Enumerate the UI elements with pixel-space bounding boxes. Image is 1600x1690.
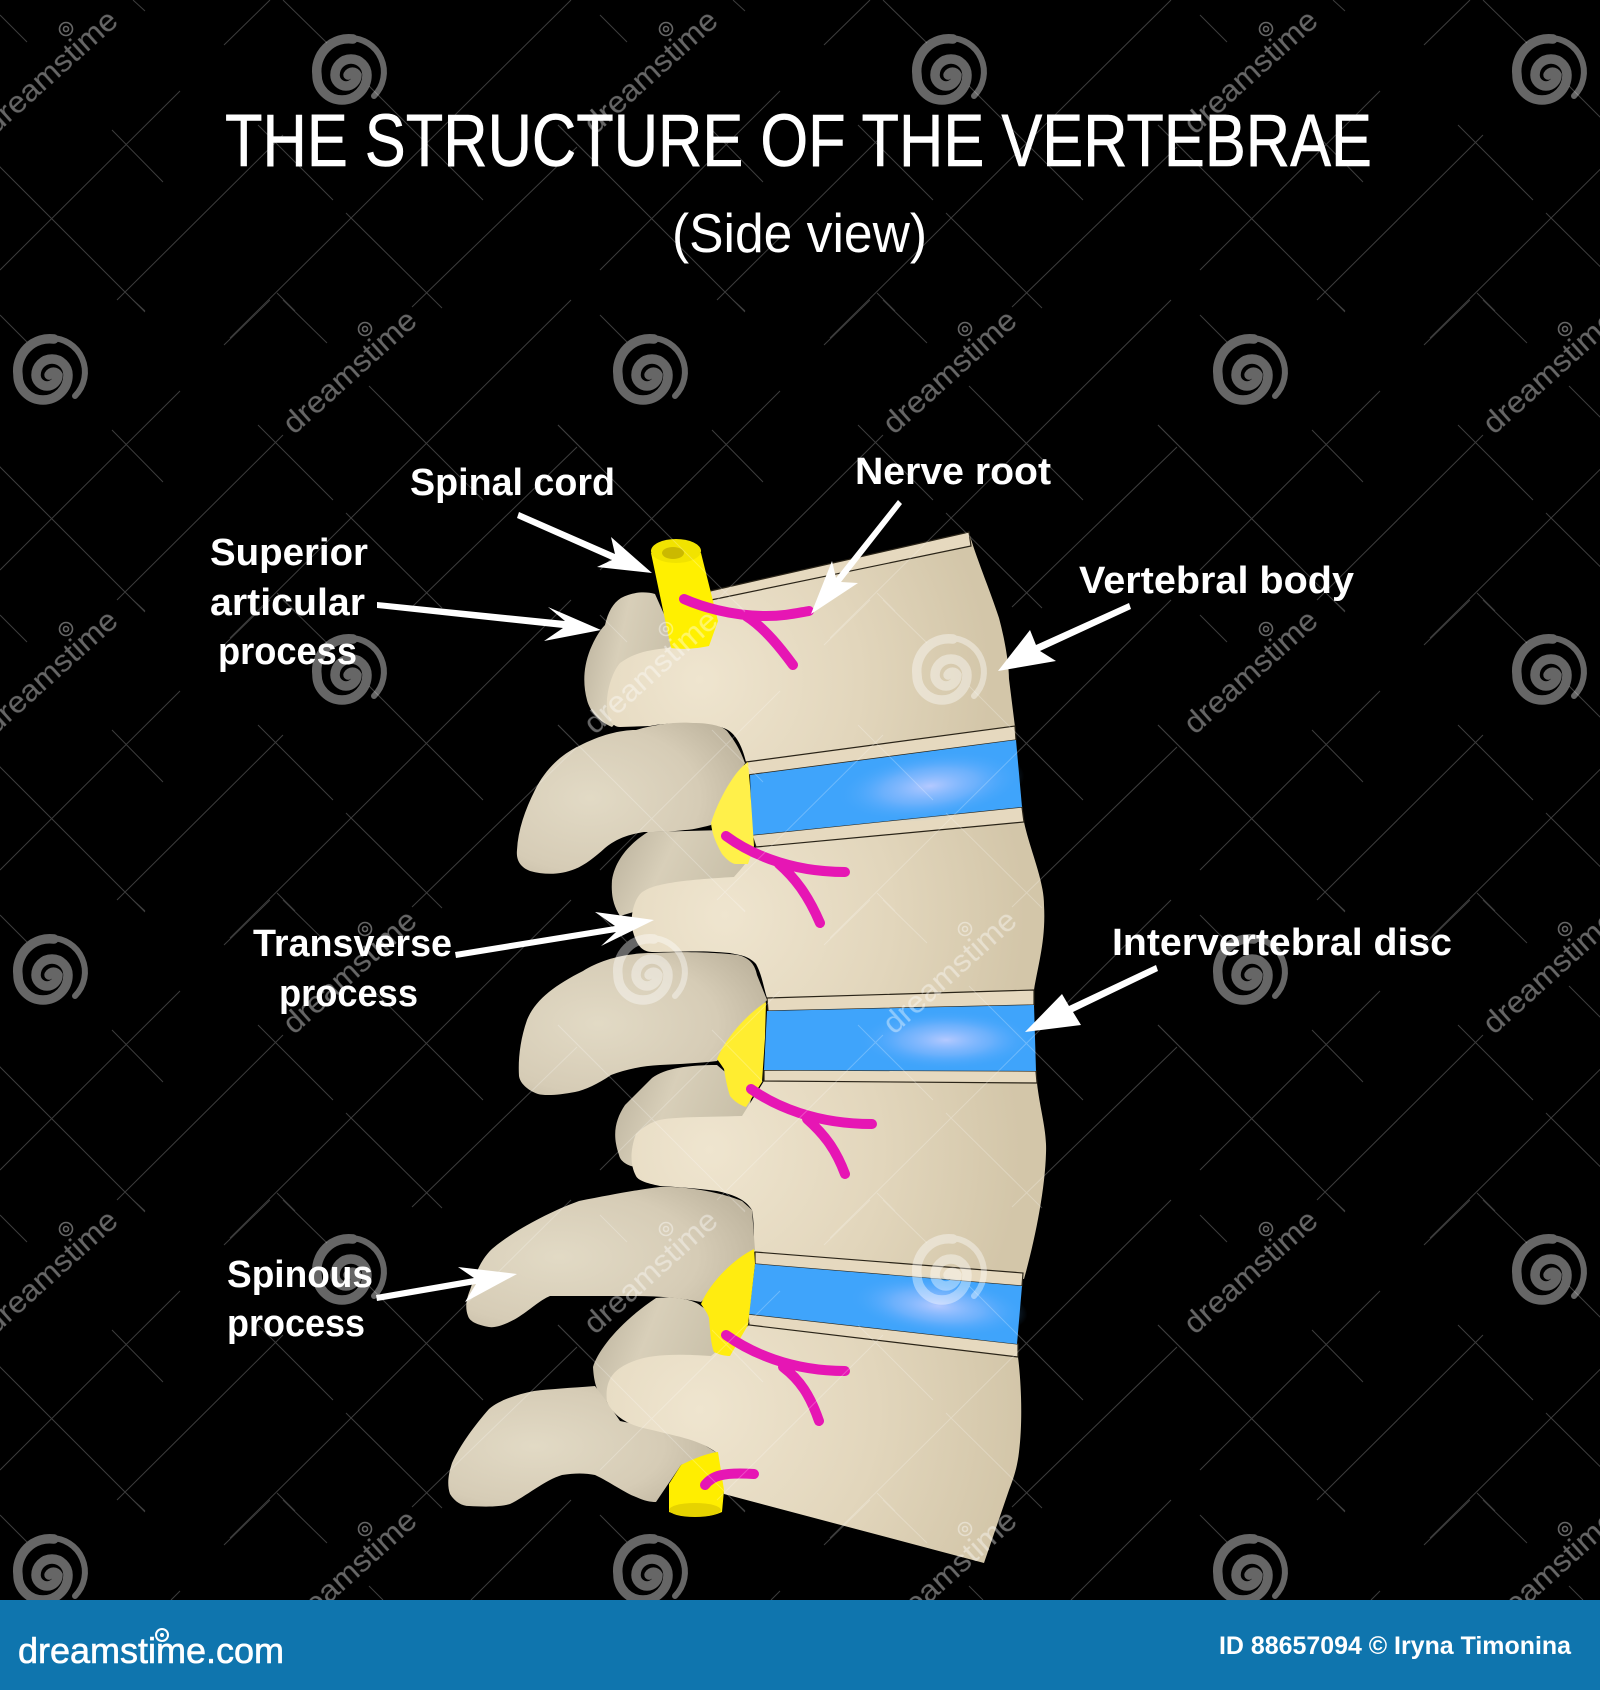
footer bar [0, 1600, 1600, 1690]
label: intervertebral disc: Intervertebral disc [1112, 922, 1452, 964]
arrow: spinous process [376, 1267, 517, 1302]
label: spinous process: process [227, 1303, 365, 1345]
watermark text: dreamstime [576, 1202, 724, 1341]
label: superior articular process: Superior [210, 532, 368, 574]
spinal cord, segment 3 [717, 1002, 766, 1107]
watermark text: dreamstime [875, 902, 1023, 1041]
arrow: vertebral body [998, 603, 1131, 671]
spinal cord, bottom segment [669, 1452, 724, 1517]
intervertebral disc 2 [764, 1005, 1036, 1071]
spinal cord, segment 4 [701, 1249, 755, 1356]
label: superior articular process: process [218, 631, 357, 673]
spinal cord, segment 2 [711, 762, 754, 864]
watermark text: dreamstime [275, 902, 423, 1041]
arrow: spinal cord [517, 512, 652, 573]
intervertebral disc 1 [750, 740, 1028, 835]
watermark text: dreamstime [875, 1502, 1023, 1641]
label: spinous process [227, 1254, 373, 1345]
watermark text: dreamstime [576, 2, 724, 141]
footer logo: dreamstime.com [18, 1630, 284, 1671]
watermark text: dreamstime [576, 602, 724, 741]
arrow: nerve root [811, 500, 902, 614]
endplates [710, 532, 1037, 1357]
label: nerve root: Nerve root [855, 451, 1051, 493]
title: THE STRUCTURE OF THE VERTEBRAE [225, 99, 1372, 182]
watermark text: dreamstime [1176, 2, 1324, 141]
label: spinous process: Spinous [227, 1254, 373, 1296]
illustration: side view of lumbar vertebrae [448, 532, 1046, 1563]
arrow: intervertebral disc [1025, 965, 1158, 1032]
watermark text: dreamstime [1176, 602, 1324, 741]
label: transverse process [253, 923, 452, 1015]
label: transverse process: process [279, 973, 418, 1015]
spinal cord, top segment [651, 539, 718, 649]
subtitle: (Side view) [672, 202, 927, 264]
arrow: superior articular process [377, 602, 601, 641]
vertebral bodies with transverse processes [607, 532, 1046, 1563]
spinous process 4 [448, 1386, 717, 1507]
superior articular processes [584, 592, 752, 1402]
label: superior articular process: articular [210, 582, 365, 624]
label: transverse process: Transverse [253, 923, 452, 965]
watermark text: dreamstime [1176, 1202, 1324, 1341]
watermark text: dreamstime [275, 1502, 423, 1641]
spinous processes [466, 723, 767, 1327]
label: vertebral body: Vertebral body [1079, 560, 1354, 602]
label: superior articular process [210, 532, 368, 673]
watermark text: dreamstime [275, 302, 423, 441]
watermark text: dreamstime [875, 302, 1023, 441]
label: spinal cord: Spinal cord [410, 462, 615, 504]
intervertebral disc 3 [749, 1264, 1031, 1345]
footer credit: ID 88657094 © Iryna Timonina [1219, 1632, 1572, 1660]
arrow: transverse process [455, 912, 654, 958]
nerve roots [684, 599, 872, 1485]
